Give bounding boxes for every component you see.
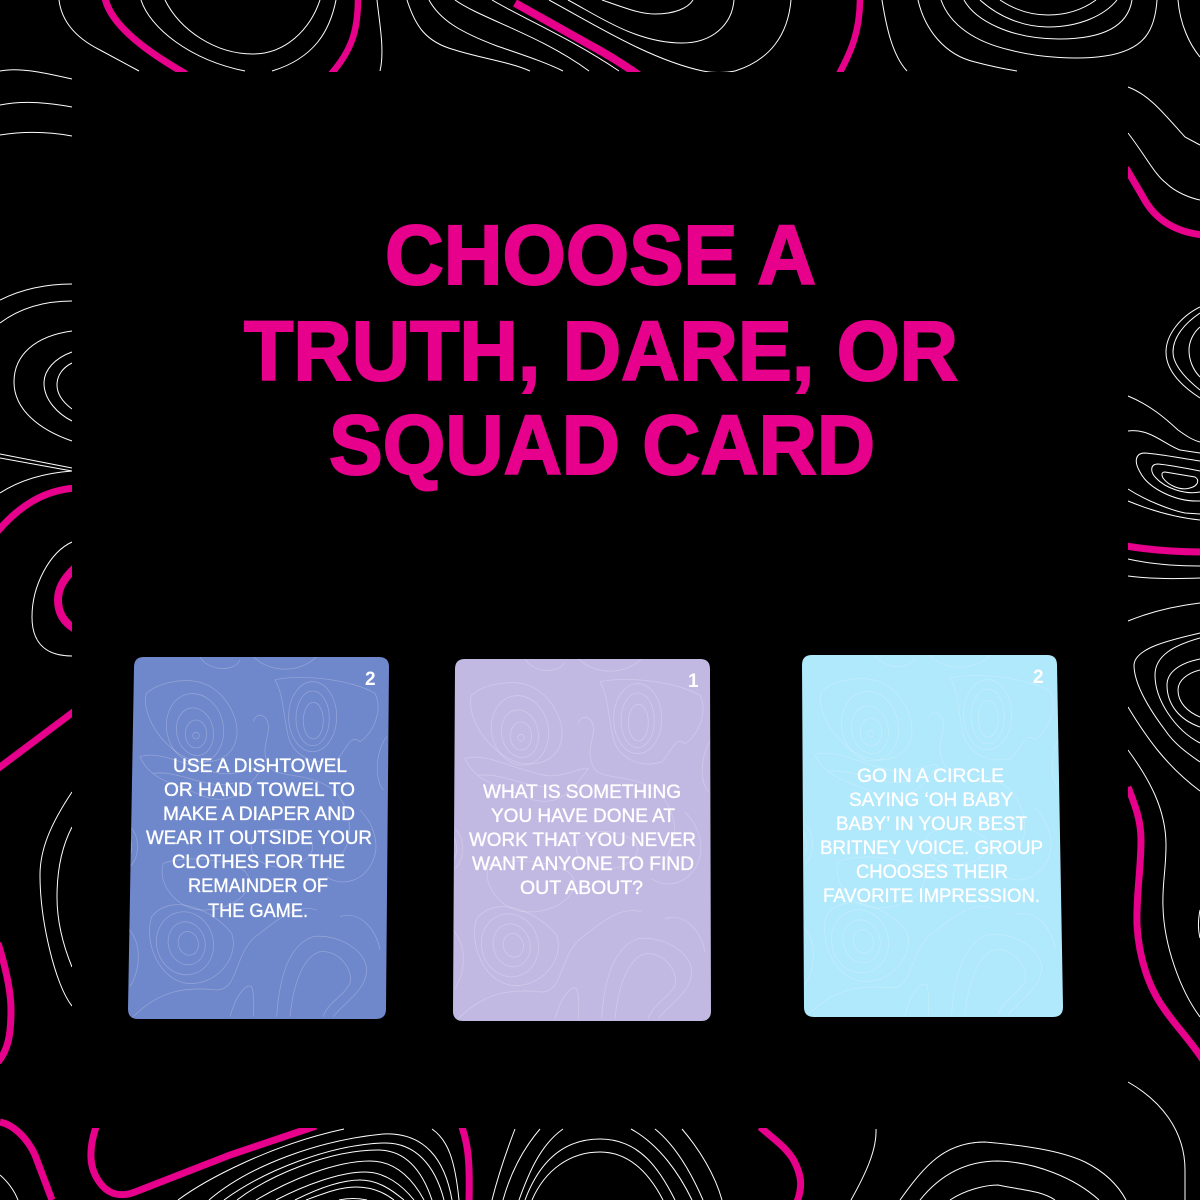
card texture	[452, 659, 725, 1019]
card prompt: YOU HAVE DONE AT	[491, 806, 675, 827]
title: TRUTH, DARE, OR	[244, 304, 958, 398]
title: SQUAD CARD	[329, 398, 875, 492]
title	[244, 208, 958, 492]
contour border: left	[0, 70, 76, 1062]
card: truth, lavender	[452, 659, 725, 1021]
card prompt	[469, 782, 696, 899]
card prompt: WORK THAT YOU NEVER	[469, 830, 696, 851]
card prompt: MAKE A DIAPER AND	[163, 804, 355, 825]
card number: 2	[1033, 667, 1044, 688]
card prompt: CHOOSES THEIR	[856, 862, 1008, 883]
card prompt	[146, 756, 372, 922]
card prompt: BABY’ IN YOUR BEST	[836, 814, 1027, 835]
card prompt: FAVORITE IMPRESSION.	[823, 886, 1040, 907]
card prompt: WEAR IT OUTSIDE YOUR	[146, 828, 372, 849]
inner black panel	[72, 72, 1128, 1128]
card number: 1	[688, 671, 699, 692]
card prompt: SAYING ‘OH BABY	[849, 790, 1013, 811]
card prompt	[820, 766, 1043, 907]
card prompt: USE A DISHTOWEL	[173, 756, 347, 777]
contour border: top	[59, 0, 1200, 76]
contour border: bottom	[0, 1122, 1126, 1200]
title: CHOOSE A	[385, 208, 816, 302]
card prompt: CLOTHES FOR THE	[172, 852, 345, 873]
card prompt: BRITNEY VOICE. GROUP	[820, 838, 1043, 859]
card prompt: WHAT IS SOMETHING	[483, 782, 681, 803]
card prompt: OR HAND TOWEL TO	[164, 780, 355, 801]
card prompt: WANT ANYONE TO FIND	[472, 854, 694, 875]
card texture	[127, 657, 400, 1017]
card prompt: REMAINDER OF	[188, 876, 328, 897]
card texture	[802, 655, 1075, 1015]
card prompt: OUT ABOUT?	[520, 878, 643, 899]
card: squad, sky blue	[802, 655, 1075, 1017]
card: dare, periwinkle	[127, 657, 400, 1019]
card prompt: GO IN A CIRCLE	[857, 766, 1004, 787]
card prompt: THE GAME.	[208, 901, 308, 922]
card number: 2	[365, 669, 376, 690]
contour border: right	[1126, 87, 1200, 1200]
